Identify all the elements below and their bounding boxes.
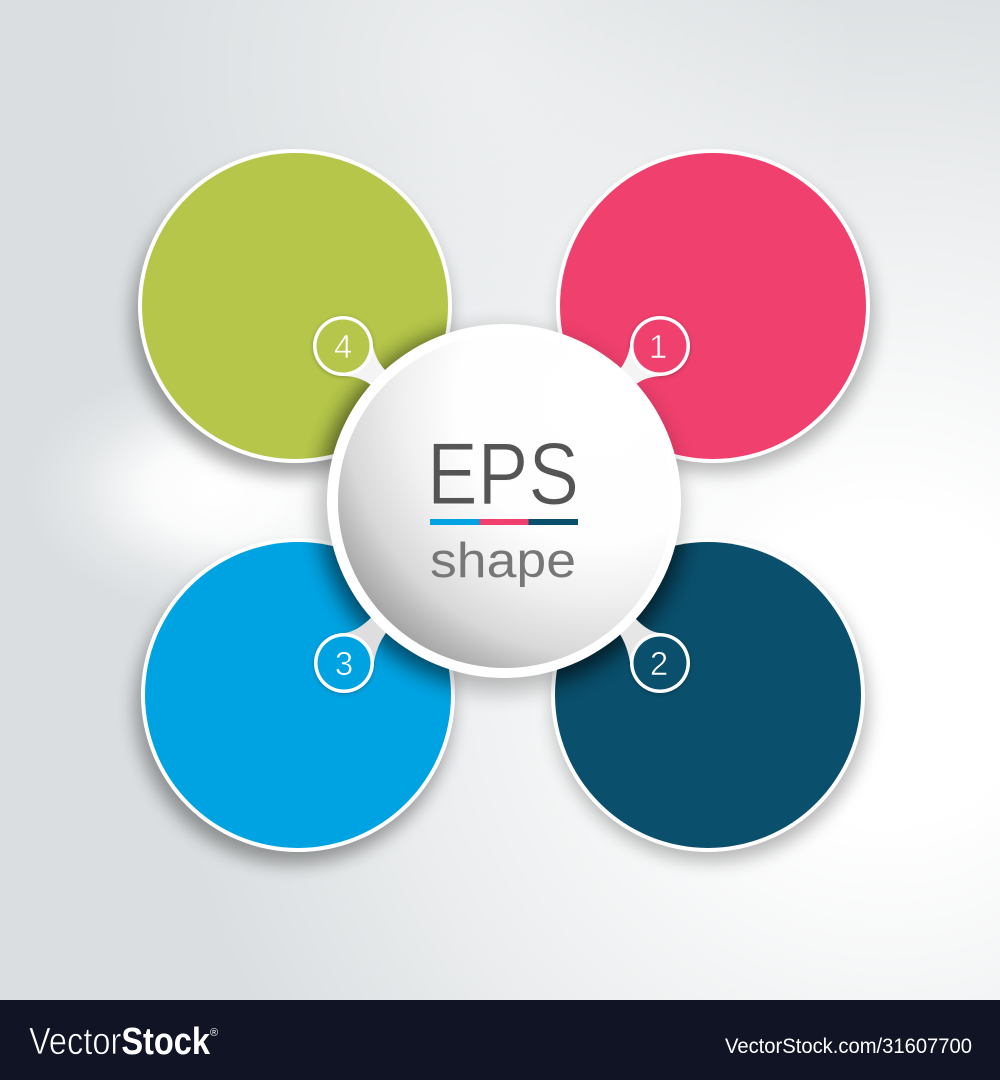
badge 2 with tail: [614, 610, 690, 694]
badge 3 with tail: 3: [335, 645, 353, 682]
tricolour underline: [430, 519, 578, 525]
title: EPS: EPS: [427, 424, 579, 523]
badge 1 with tail: 1: [649, 328, 667, 365]
badge 3 with tail: [314, 610, 392, 694]
footer bar: [0, 1000, 1000, 1080]
central circle: [327, 324, 681, 678]
badge 4 with tail: 4: [334, 328, 352, 365]
footer logo: VectorStock: [29, 1021, 211, 1063]
circle: navy segment 2: [551, 538, 868, 861]
circle: blue segment 3: [136, 538, 455, 864]
subtitle: shape: shape: [430, 534, 576, 588]
footer url: VectorStock.com/31607700: [725, 1035, 972, 1058]
circle: pink segment 1: [556, 149, 874, 472]
badge 2 with tail: 2: [650, 645, 668, 682]
circle: green segment 4: [133, 149, 452, 475]
badge 1 with tail: [614, 316, 690, 392]
badge 4 with tail: [313, 316, 392, 392]
registered mark: ®: [210, 1027, 218, 1039]
central circle shadow on segments: [318, 325, 686, 692]
